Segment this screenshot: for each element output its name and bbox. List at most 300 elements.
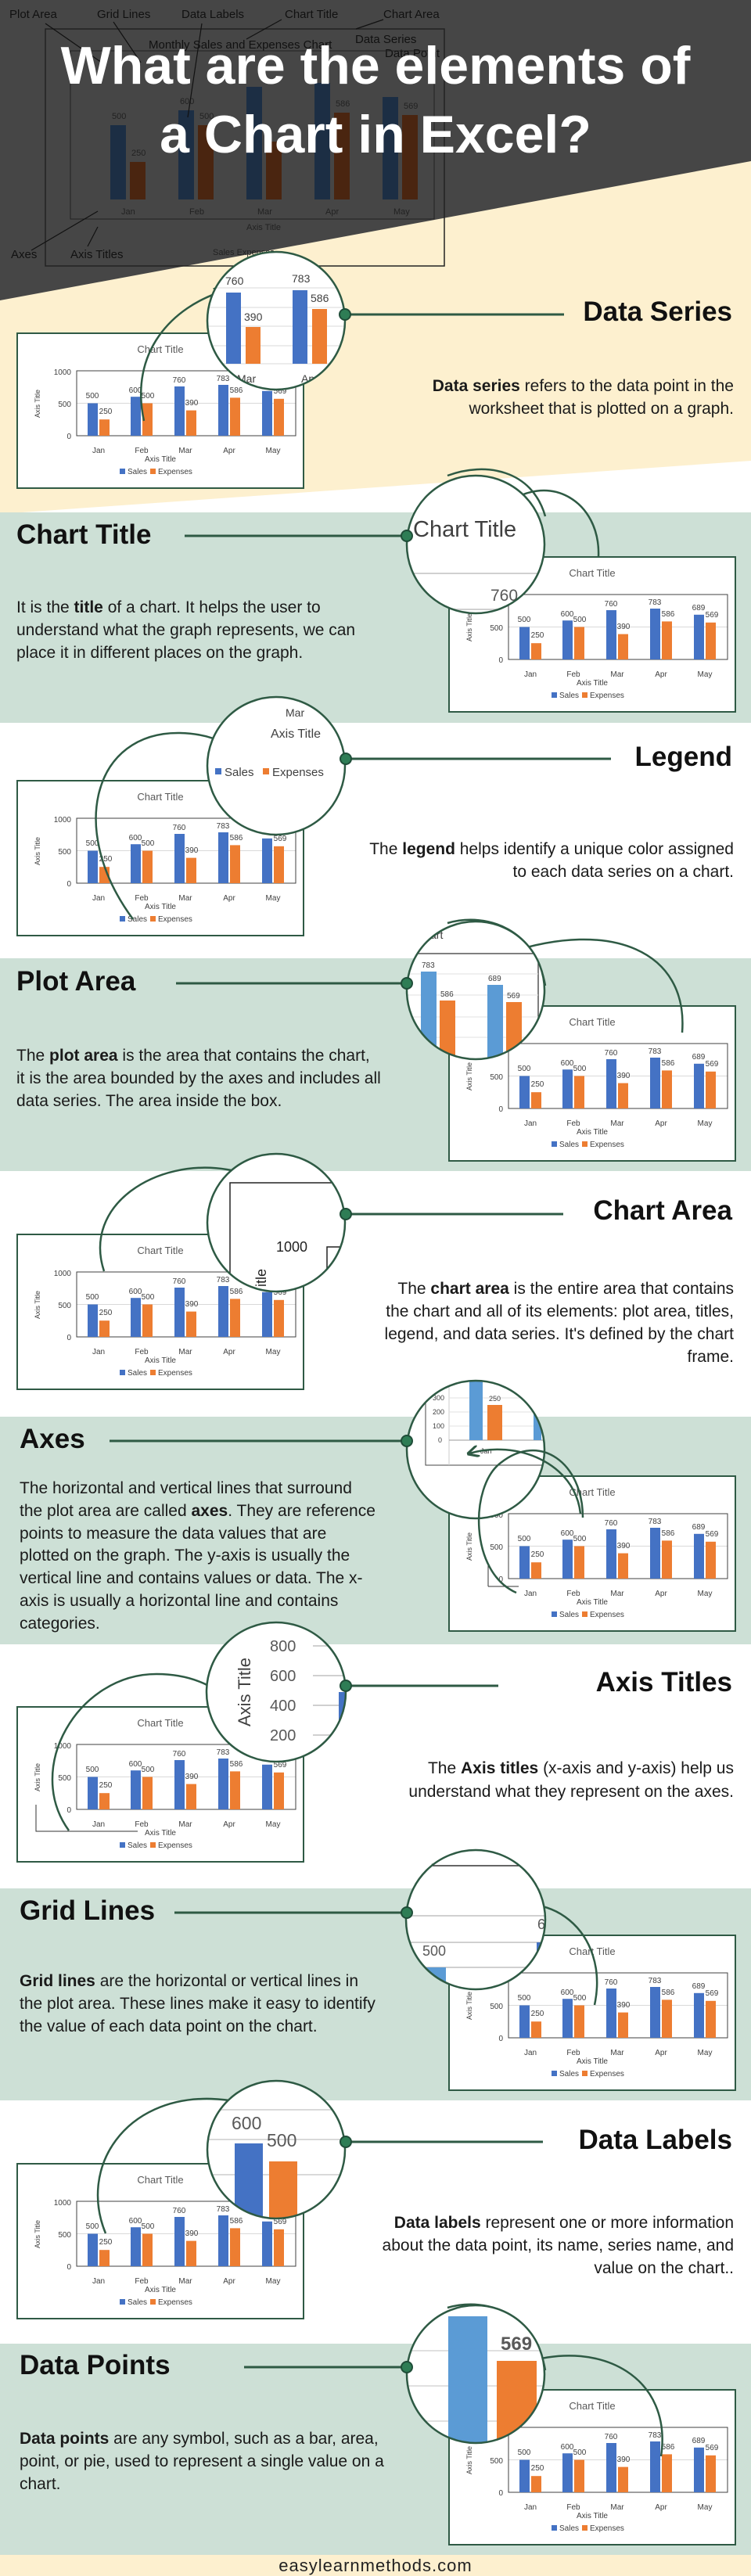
chart: legend: 586 xyxy=(230,834,243,842)
chart: plot area: May xyxy=(698,1119,712,1128)
chart: axes: 569 xyxy=(706,1530,719,1539)
chart: chart area: Apr xyxy=(223,1348,235,1356)
chart: axes: Mar xyxy=(610,1590,624,1598)
chart: data points: 500 xyxy=(518,2448,531,2457)
chart: chart title: 760 xyxy=(605,600,618,609)
chart: chart area: Chart Title xyxy=(137,1245,184,1256)
magnifier: axis titles xyxy=(52,1622,498,1831)
chart: axis titles: 600 xyxy=(129,1760,142,1769)
chart: plot area: 390 xyxy=(617,1072,631,1080)
chart: legend: 1000 xyxy=(54,816,71,825)
header faint chart: 586 xyxy=(336,99,350,109)
chart: chart title: 600 xyxy=(561,610,574,619)
chart: data points: 1000 xyxy=(486,2425,503,2434)
chart: data series: 760 xyxy=(173,376,186,385)
chart: axes: 250 xyxy=(531,1550,544,1559)
magnifier: plot area: 569 xyxy=(507,992,520,1001)
chart: axis titles: 689 xyxy=(261,1754,274,1762)
header faint chart: 569 xyxy=(404,102,418,111)
chart: grid lines: 600 xyxy=(561,1989,574,1997)
chart: data series: Axis Title xyxy=(145,455,176,464)
chart: data points: May xyxy=(698,2503,712,2512)
band: data points section xyxy=(0,2344,751,2555)
title: What are the elements of xyxy=(61,36,690,95)
chart: data series: Feb xyxy=(135,447,149,455)
chart: plot area: 250 xyxy=(531,1080,544,1089)
text: grid lines: Grid lines are the horizontal or vertical lines in xyxy=(20,1972,358,1990)
magnifier: chart title: Chart Title xyxy=(413,517,516,542)
text: axes: plotted on the graph. The y-axis is usually the xyxy=(20,1547,350,1565)
chart: axis titles: May xyxy=(266,1820,280,1829)
chart: grid lines: Jan xyxy=(524,2049,537,2057)
chart: grid lines: 500 xyxy=(490,2003,503,2011)
chart: axis titles: 0 xyxy=(66,1806,71,1815)
chart: data labels: 250 xyxy=(99,2238,113,2247)
magnifier: axis titles: 800 xyxy=(270,1638,296,1655)
magnifier: axis titles: 400 xyxy=(270,1698,296,1715)
text: plot area xyxy=(16,1047,381,1110)
text: chart area: frame. xyxy=(687,1348,734,1366)
magnifier: data series xyxy=(141,252,564,421)
chart: data series: Mar xyxy=(178,447,192,455)
chart: axes: 1000 xyxy=(486,1511,503,1520)
text: chart title xyxy=(16,598,355,662)
magnifier: legend: Expenses xyxy=(272,766,324,779)
chart: data points: 500 xyxy=(490,2457,503,2466)
header faint chart: 600 xyxy=(180,97,194,106)
chart: chart area: 250 xyxy=(99,1309,113,1317)
chart: data labels: 569 xyxy=(274,2218,287,2226)
chart: axis titles: 1000 xyxy=(54,1742,71,1751)
magnifier: axes: 250 xyxy=(489,1395,501,1403)
magnifier: axis titles: 600 xyxy=(270,1668,296,1685)
chart: plot area: Mar xyxy=(610,1119,624,1128)
header faint chart: 250 xyxy=(131,149,146,158)
magnifiers overlay xyxy=(52,250,684,2456)
header faint chart xyxy=(9,8,445,267)
chart: data labels: 0 xyxy=(66,2263,71,2272)
chart: chart title: 689 xyxy=(692,604,706,613)
chart: legend: Sales xyxy=(128,915,147,924)
magnifier: axes xyxy=(110,1377,583,1593)
chart: chart title: Apr xyxy=(655,670,667,679)
chart: data points: Axis Title xyxy=(577,2512,608,2520)
magnifier: grid lines xyxy=(174,1850,597,2005)
chart: plot area: 1000 xyxy=(486,1041,503,1050)
text: data labels xyxy=(383,2214,734,2277)
chart: axes: 500 xyxy=(518,1535,531,1543)
chart: chart area: 586 xyxy=(230,1288,243,1296)
chart: legend: 500 xyxy=(58,848,71,857)
chart: legend: 0 xyxy=(66,880,71,889)
chart: chart title: 500 xyxy=(518,616,531,624)
magnifier: data series: 390 xyxy=(244,311,263,323)
magnifier: data labels: 600 xyxy=(232,2113,261,2133)
chart: axes: Feb xyxy=(566,1590,580,1598)
magnifier: axes: 200 xyxy=(433,1408,444,1416)
text: axis titles: understand what they represent on the axes. xyxy=(408,1783,734,1801)
header faint chart: Data Point xyxy=(385,47,440,60)
chart: legend: Chart Title xyxy=(137,791,184,803)
heading: Chart Area: Chart Area xyxy=(593,1195,732,1226)
chart: axis titles: Expenses xyxy=(158,1841,192,1850)
header faint chart: Apr xyxy=(325,207,339,217)
chart: axis titles: 500 xyxy=(86,1766,99,1774)
chart: data series: Axis Title xyxy=(34,390,41,418)
chart: grid lines: 500 xyxy=(573,1994,587,2003)
header faint chart: 500 xyxy=(199,112,214,121)
magnifier: plot area: 783 xyxy=(422,961,435,970)
chart: chart area: May xyxy=(266,1348,280,1356)
chart: plot area: 500 xyxy=(518,1065,531,1073)
chart: data points xyxy=(448,2389,736,2545)
chart: axes: 390 xyxy=(617,1542,631,1550)
chart: data points: Jan xyxy=(524,2503,537,2512)
chart: axes: 586 xyxy=(662,1529,675,1538)
magnifier: data points: 569 xyxy=(501,2333,532,2355)
chart: data series: Jan xyxy=(92,447,105,455)
text: data points: Data points are any symbol, such as a bar, area, xyxy=(20,2430,379,2448)
chart: axis titles: 390 xyxy=(185,1773,199,1781)
text: chart area: The chart area is the entire area that contains xyxy=(397,1280,734,1298)
header faint chart: May xyxy=(393,207,410,217)
chart: grid lines: Feb xyxy=(566,2049,580,2057)
chart: data points: 689 xyxy=(692,2437,706,2445)
heading: Data Labels: Data Labels xyxy=(579,2125,732,2155)
header faint chart: Sales Expenses xyxy=(213,248,275,257)
header faint chart: Grid Lines xyxy=(97,8,150,21)
magnifier: axes: 100 xyxy=(433,1422,444,1430)
chart: axes: 760 xyxy=(605,1519,618,1528)
chart: data series: 500 xyxy=(58,401,71,409)
band: plot area section xyxy=(0,958,751,1171)
magnifier: chart area xyxy=(100,1154,563,1299)
chart: plot area: 500 xyxy=(490,1073,503,1082)
chart: grid lines: Mar xyxy=(610,2049,624,2057)
heading: Data Points: Data Points xyxy=(20,2350,171,2380)
header faint chart: Monthly Sales and Expenses Chart xyxy=(149,38,332,52)
chart: data points: 500 xyxy=(573,2448,587,2457)
chart: legend: 250 xyxy=(99,855,113,864)
text: legend xyxy=(369,840,734,881)
chart: data labels: Axis Title xyxy=(34,2220,41,2248)
text: data series: worksheet that is plotted on a graph. xyxy=(469,400,734,418)
chart: plot area: Sales xyxy=(559,1141,579,1149)
chart: axes: Expenses xyxy=(590,1611,624,1619)
chart: chart area: Axis Title xyxy=(34,1291,41,1319)
chart: chart area: 500 xyxy=(58,1302,71,1310)
chart: legend: Apr xyxy=(223,894,235,903)
chart: legend: 689 xyxy=(261,828,274,836)
text: data labels: about the data point, its name, series name, and xyxy=(383,2236,734,2254)
chart: data labels: Mar xyxy=(178,2277,192,2286)
magnifier: data points xyxy=(244,2305,663,2456)
chart: plot area: Axis Title xyxy=(465,1062,473,1090)
chart: chart area: Jan xyxy=(92,1348,105,1356)
magnifier: data series: 783 xyxy=(292,272,311,285)
chart: data series: 783 xyxy=(217,375,230,383)
chart: chart title: 569 xyxy=(706,611,719,620)
footer band xyxy=(0,2555,751,2576)
text: legend: to each data series on a chart. xyxy=(512,863,734,881)
magnifier: plot area: 689 xyxy=(488,975,501,983)
chart: axis titles: Apr xyxy=(223,1820,235,1829)
text: grid lines: the value of each data point on the chart. xyxy=(20,2017,318,2035)
chart: chart area: 0 xyxy=(66,1334,71,1342)
chart: legend: May xyxy=(266,894,280,903)
chart: data labels: 390 xyxy=(185,2229,199,2238)
text: data labels: Data labels represent one or more information xyxy=(394,2214,734,2232)
chart: data labels xyxy=(16,2163,304,2319)
magnifier: chart title xyxy=(185,469,598,613)
text: chart area xyxy=(385,1280,734,1366)
chart: chart title: Sales xyxy=(559,692,579,700)
chart: plot area: 500 xyxy=(573,1065,587,1073)
chart: chart area: 500 xyxy=(142,1293,155,1302)
magnifier: grid lines: 6 xyxy=(537,1917,545,1932)
chart: grid lines: 586 xyxy=(662,1989,675,1997)
band: grid lines section xyxy=(0,1888,751,2100)
chart: legend: Jan xyxy=(92,894,105,903)
chart: chart title xyxy=(448,556,736,713)
chart: plot area: Chart Title xyxy=(569,1016,616,1028)
header faint chart: Feb xyxy=(189,207,204,217)
chart: axis titles: 500 xyxy=(142,1766,155,1774)
text: data series: Data series refers to the data point in the xyxy=(433,377,734,395)
chart: chart title: Mar xyxy=(610,670,624,679)
heading: Axes: Axes xyxy=(20,1424,85,1454)
chart: chart title: Chart Title xyxy=(569,567,616,579)
chart: grid lines: Expenses xyxy=(590,2070,624,2078)
chart: chart area: Mar xyxy=(178,1348,192,1356)
chart: plot area: 0 xyxy=(498,1105,503,1114)
text: axes: categories. xyxy=(20,1615,100,1633)
chart: data labels: Sales xyxy=(128,2298,147,2307)
text: chart title: understand what the graph represents, we can xyxy=(16,621,355,639)
chart: axis titles: 760 xyxy=(173,1750,186,1759)
chart: plot area: 783 xyxy=(649,1047,662,1056)
footer band: easylearnmethods.com xyxy=(278,2556,473,2575)
text: data points: point, or pie, used to represent a single value on a xyxy=(20,2452,384,2470)
chart: data points: 600 xyxy=(561,2443,574,2452)
header faint chart: Chart Title xyxy=(285,8,338,21)
chart: data series xyxy=(16,332,304,489)
chart: grid lines: Axis Title xyxy=(465,1992,473,2020)
chart: legend: 390 xyxy=(185,846,199,855)
chart: axis titles: 569 xyxy=(274,1761,287,1769)
chart: axes xyxy=(448,1475,736,1632)
chart: data series: 600 xyxy=(129,386,142,395)
chart: legend: Mar xyxy=(178,894,192,903)
chart: data labels: 500 xyxy=(142,2222,155,2231)
magnifier: axes: 0 xyxy=(438,1436,442,1444)
chart: data points: Axis Title xyxy=(465,2446,473,2474)
chart: chart title: May xyxy=(698,670,712,679)
magnifier: legend xyxy=(96,697,611,919)
text: grid lines xyxy=(20,1972,376,2035)
magnifier: grid lines: 500 xyxy=(422,1943,446,1959)
chart: data series: 1000 xyxy=(54,368,71,377)
chart: chart area: 1000 xyxy=(54,1270,71,1278)
chart: data labels: 600 xyxy=(129,2217,142,2226)
magnifier: legend: Mar xyxy=(286,706,304,719)
chart: plot area: Expenses xyxy=(590,1141,624,1149)
chart: chart title: 390 xyxy=(617,623,631,631)
chart: chart title: 586 xyxy=(662,610,675,619)
text: plot area: The plot area is the area that contains the chart, xyxy=(16,1047,370,1065)
band: axes section xyxy=(0,1417,751,1644)
chart: chart title: Axis Title xyxy=(465,613,473,641)
chart: plot area: 760 xyxy=(605,1049,618,1058)
chart: plot area: Axis Title xyxy=(577,1128,608,1137)
chart: data labels: 760 xyxy=(173,2207,186,2215)
text: chart title: place it in different places on the graph. xyxy=(16,644,303,662)
chart: axes: 600 xyxy=(561,1529,574,1538)
chart: axis titles: Feb xyxy=(135,1820,149,1829)
chart: plot area: 600 xyxy=(561,1059,574,1068)
chart: data labels: 500 xyxy=(58,2231,71,2240)
chart: legend: 500 xyxy=(86,839,99,848)
chart: chart title: Axis Title xyxy=(577,679,608,688)
chart: chart area: Expenses xyxy=(158,1369,192,1378)
chart: data series: Expenses xyxy=(158,468,192,476)
chart: chart title: 783 xyxy=(649,598,662,607)
chart: chart title: 500 xyxy=(573,616,587,624)
magnifier: axis titles: Axis Title xyxy=(235,1658,254,1726)
chart: grid lines: Apr xyxy=(655,2049,667,2057)
chart: legend: Feb xyxy=(135,894,149,903)
title: a Chart in Excel? xyxy=(160,105,591,164)
chart: axis titles: Axis Title xyxy=(145,1829,176,1838)
chart: axis titles xyxy=(16,1706,304,1863)
chart: data points: Apr xyxy=(655,2503,667,2512)
heading: Legend: Legend xyxy=(635,742,732,772)
chart: grid lines: Chart Title xyxy=(569,1945,616,1957)
heading: Chart Title: Chart Title xyxy=(16,519,151,550)
chart: data labels: Axis Title xyxy=(145,2286,176,2294)
header faint chart: Axis Title xyxy=(246,223,281,232)
chart: grid lines: May xyxy=(698,2049,712,2057)
chart: data points: 783 xyxy=(649,2431,662,2440)
chart: chart title: 0 xyxy=(498,656,503,665)
chart: legend: 500 xyxy=(142,839,155,848)
text: legend: The legend helps identify a unique color assigned xyxy=(369,840,734,858)
magnifier: chart area: itle xyxy=(253,1269,269,1287)
chart: axes: Axis Title xyxy=(465,1532,473,1561)
magnifier: axes: 300 xyxy=(433,1394,444,1402)
chart: chart title: Expenses xyxy=(590,692,624,700)
magnifier: data labels xyxy=(98,2081,543,2233)
chart: axes: Chart Title xyxy=(569,1486,616,1498)
chart: chart title: Feb xyxy=(566,670,580,679)
text: plot area: it is the area bounded by the axes and includes all xyxy=(16,1069,381,1087)
chart: data series: Sales xyxy=(128,468,147,476)
header faint chart: Data Labels xyxy=(181,8,244,21)
chart: chart area: Feb xyxy=(135,1348,149,1356)
header faint chart: Plot Area xyxy=(9,8,58,21)
chart: axis titles: 586 xyxy=(230,1760,243,1769)
magnifier: axes: Jan xyxy=(480,1447,492,1455)
chart: grid lines: 569 xyxy=(706,1989,719,1998)
chart: data labels: Jan xyxy=(92,2277,105,2286)
chart: data points: Sales xyxy=(559,2524,579,2533)
chart: data series: 250 xyxy=(99,408,113,416)
text: grid lines: the plot area. These lines make it easy to identify xyxy=(20,1995,376,2013)
chart: grid lines: 783 xyxy=(649,1977,662,1985)
chart: plot area xyxy=(448,1005,736,1162)
chart: legend: Expenses xyxy=(158,915,192,924)
chart: axes: May xyxy=(698,1590,712,1598)
chart: chart area: 600 xyxy=(129,1288,142,1296)
text: axes xyxy=(20,1479,376,1633)
chart: axes: Apr xyxy=(655,1590,667,1598)
chart: grid lines: Axis Title xyxy=(577,2057,608,2066)
heading: Axis Titles: Axis Titles xyxy=(596,1667,732,1698)
chart: data series: Chart Title xyxy=(137,343,184,355)
chart: axes: Jan xyxy=(524,1590,537,1598)
chart: data labels: 783 xyxy=(217,2205,230,2214)
chart: data points: 390 xyxy=(617,2456,631,2464)
magnifier: plot area: 586 xyxy=(440,990,454,999)
chart: axis titles: 250 xyxy=(99,1781,113,1790)
header faint chart: Data Series xyxy=(355,33,416,46)
text: chart area: legend, and data series. It's defined by the chart xyxy=(385,1325,734,1343)
chart: data points: Expenses xyxy=(590,2524,624,2533)
magnifier: data series: Mar xyxy=(237,372,256,385)
chart: chart area: Sales xyxy=(128,1369,147,1378)
band: chart title section xyxy=(0,512,751,723)
chart: axis titles: Mar xyxy=(178,1820,192,1829)
chart: chart area: 689 xyxy=(261,1281,274,1290)
header faint chart: Mar xyxy=(257,207,272,217)
magnifier: data series: Apr xyxy=(301,372,318,385)
chart: chart title: 1000 xyxy=(486,592,503,601)
title xyxy=(61,36,691,164)
magnifier: chart area: 1000 xyxy=(276,1239,307,1255)
text: data points: chart. xyxy=(20,2475,61,2493)
chart: plot area: 569 xyxy=(706,1060,719,1069)
chart: data labels: 500 xyxy=(86,2222,99,2231)
chart: data points: Chart Title xyxy=(569,2400,616,2412)
chart: data labels: Apr xyxy=(223,2277,235,2286)
chart: plot area: 586 xyxy=(662,1059,675,1068)
text: plot area: data series. The area inside the box. xyxy=(16,1092,282,1110)
chart: data series: 0 xyxy=(66,433,71,441)
chart: axes: 0 xyxy=(498,1575,503,1584)
chart: legend xyxy=(16,780,304,936)
text: axes: axis is usually a horizontal line and contains xyxy=(20,1592,338,1610)
header faint chart: Axes xyxy=(11,248,37,261)
chart: chart area: 783 xyxy=(217,1276,230,1284)
chart: axis titles: Jan xyxy=(92,1820,105,1829)
text: chart title: It is the title of a chart. It helps the user to xyxy=(16,598,321,616)
chart: data series: 500 xyxy=(86,392,99,401)
chart: data points: 569 xyxy=(706,2444,719,2452)
magnifier: legend: Sales xyxy=(225,766,254,779)
chart: grid lines: 1000 xyxy=(486,1971,503,1979)
chart: grid lines: 390 xyxy=(617,2001,631,2010)
chart: chart area: 760 xyxy=(173,1277,186,1286)
text: axes: The horizontal and vertical lines that surround xyxy=(20,1479,352,1497)
chart: data series: 586 xyxy=(230,386,243,395)
chart: axis titles: 500 xyxy=(58,1774,71,1783)
text: axes: the plot area are called axes. They are reference xyxy=(20,1502,376,1520)
chart: grid lines: 500 xyxy=(518,1994,531,2003)
chart: chart title: Jan xyxy=(524,670,537,679)
chart: plot area: 689 xyxy=(692,1053,706,1062)
chart: data series: 569 xyxy=(274,387,287,396)
chart: grid lines: Sales xyxy=(559,2070,579,2078)
